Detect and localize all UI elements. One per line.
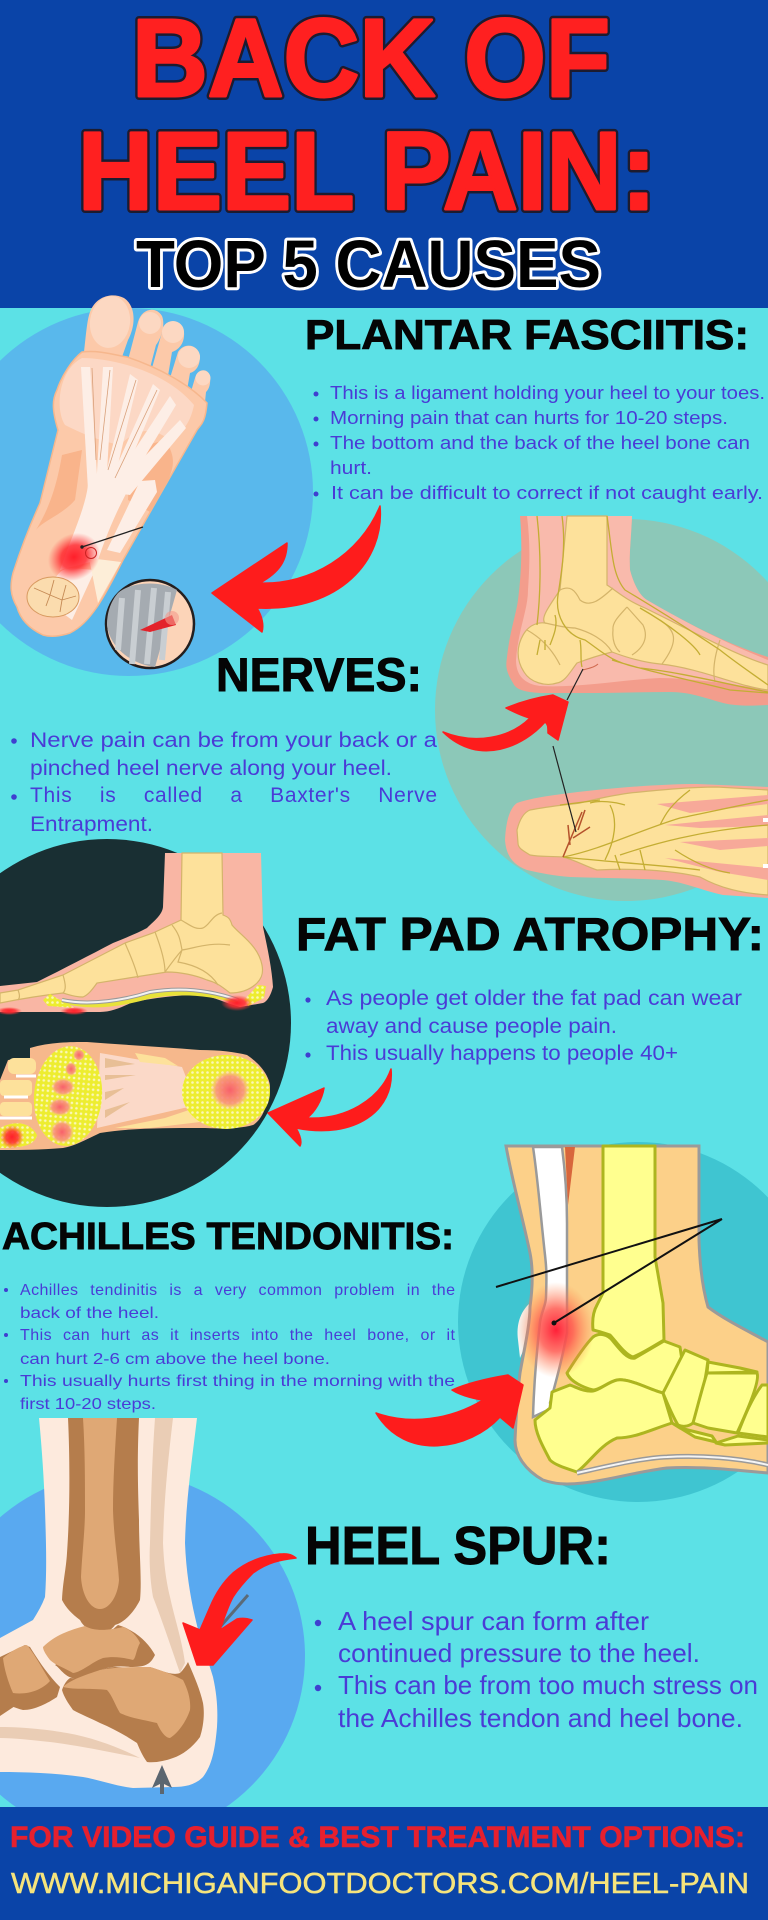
wedge to inset (89, 558, 121, 603)
text: heel spur bullets: continued pressure to the heel. (338, 1638, 700, 1668)
text: achilles bullets (4, 1282, 456, 1413)
website url: WWW.MICHIGANFOOTDOCTORS.COM/HEEL-PAIN (11, 1868, 749, 1900)
heading: nerves: NERVES: (216, 648, 422, 701)
text: fat pad bullets: As people get older the fat pad can wear (326, 987, 742, 1010)
heading: fat pad atrophy: FAT PAD ATROPHY: (296, 908, 764, 960)
text: heel spur bullets: A heel spur can form after (338, 1606, 649, 1636)
bursa (518, 1303, 532, 1358)
foot plan view with fat pads (0, 1042, 270, 1150)
plantar stripe (0, 1727, 140, 1758)
fascia fan (45, 367, 186, 620)
text: plantar fasciitis bullets: hurt. (330, 458, 372, 478)
text: plantar fasciitis bullets: Morning pain that can hurts for 10-20 steps. (330, 408, 728, 428)
text: heel spur bullets (315, 1606, 758, 1733)
text: plantar fasciitis bullets: The bottom and the back of the heel bone can (330, 433, 750, 453)
talus (55, 1625, 155, 1679)
text: nerves bullets: Nerve pain can be from your back or a (30, 729, 437, 752)
subtitle: TOP 5 CAUSES (136, 227, 601, 302)
text: plantar fasciitis bullets: This is a ligament holding your heel to your toes. (330, 383, 765, 403)
title line 1 fill: BACK OF (132, 0, 610, 120)
pain spot (39, 524, 109, 590)
tibia (62, 1418, 141, 1632)
heading: achilles tendonitis: ACHILLES TENDONITIS: (2, 1216, 454, 1258)
panel: plantar fasciitis illustration (0, 293, 313, 676)
bones side view (518, 516, 768, 690)
navicular (0, 1645, 60, 1710)
panel: heel spur illustration (0, 1418, 305, 1840)
text: achilles bullets: can hurt 2-6 cm above the heel bone. (20, 1351, 330, 1368)
soleus sliver (565, 1147, 575, 1205)
text: nerves bullets: This is called a Baxter's Nerve (30, 784, 437, 807)
metatarsal gaps (657, 795, 768, 880)
foot plan view (505, 784, 768, 898)
text: fat pad bullets: away and cause people pain. (326, 1015, 617, 1038)
foot sole (11, 352, 207, 636)
plantar fascia (577, 1456, 768, 1473)
text: achilles bullets: This can hurt as it inserts into the heel bone, or it (20, 1327, 456, 1344)
nerve branches side view (537, 516, 768, 693)
text: nerves bullets (11, 729, 437, 836)
arrow: fat pad (268, 1069, 391, 1146)
heel bone (27, 577, 79, 617)
text: heel spur bullets: the Achilles tendon and heel bone. (338, 1703, 743, 1733)
heading: plantar fasciitis: PLANTAR FASCIITIS: (305, 311, 749, 358)
text: plantar fasciitis bullets: It can be difficult to correct if not caught early. (331, 483, 763, 503)
header banner (0, 0, 768, 308)
title line 1: BACK OF (132, 0, 610, 120)
text: nerves bullets: Entrapment. (30, 813, 153, 836)
panel: achilles illustration (458, 1142, 768, 1502)
text: achilles bullets: Achilles tendinitis is a very common problem in the (20, 1282, 455, 1299)
tendon (533, 1147, 567, 1417)
inset circle: torn ligament (106, 580, 194, 668)
text: achilles bullets: back of the heel. (20, 1305, 159, 1322)
foot bones (593, 1146, 664, 1357)
spur pointer (152, 1765, 172, 1794)
call to action: FOR VIDEO GUIDE & BEST TREATMENT OPTIONS: (10, 1821, 745, 1854)
arch fat pads (43, 985, 266, 1008)
arrow: heel spur (183, 1554, 296, 1665)
text: achilles bullets: first 10-20 steps. (20, 1396, 156, 1413)
tendon stripe (150, 1418, 185, 1673)
text: achilles bullets: This usually hurts first thing in the morning with the (20, 1373, 455, 1390)
title line 2: HEEL PAIN: (78, 110, 656, 233)
panel: fat pad illustration (0, 839, 291, 1207)
text: plantar fasciitis bullets (314, 383, 765, 503)
text: fat pad bullets (305, 987, 742, 1065)
heading: heel spur: HEEL SPUR: (305, 1516, 611, 1576)
text: nerves bullets: pinched heel nerve along your heel. (30, 757, 392, 780)
text: heel spur bullets: This can be from too much stress on (338, 1670, 758, 1700)
arrow: achilles (376, 1375, 523, 1446)
arrow: nerves (443, 695, 568, 751)
calcaneus (62, 1662, 204, 1762)
title line 2 fill: HEEL PAIN: (78, 110, 656, 233)
pain glow (518, 1282, 594, 1378)
panel: nerves illustration (435, 516, 768, 901)
toes (84, 295, 210, 412)
text: fat pad bullets: This usually happens to people 40+ (326, 1042, 678, 1065)
arrow: plantar fasciitis (212, 506, 380, 632)
footer banner (0, 1807, 768, 1920)
